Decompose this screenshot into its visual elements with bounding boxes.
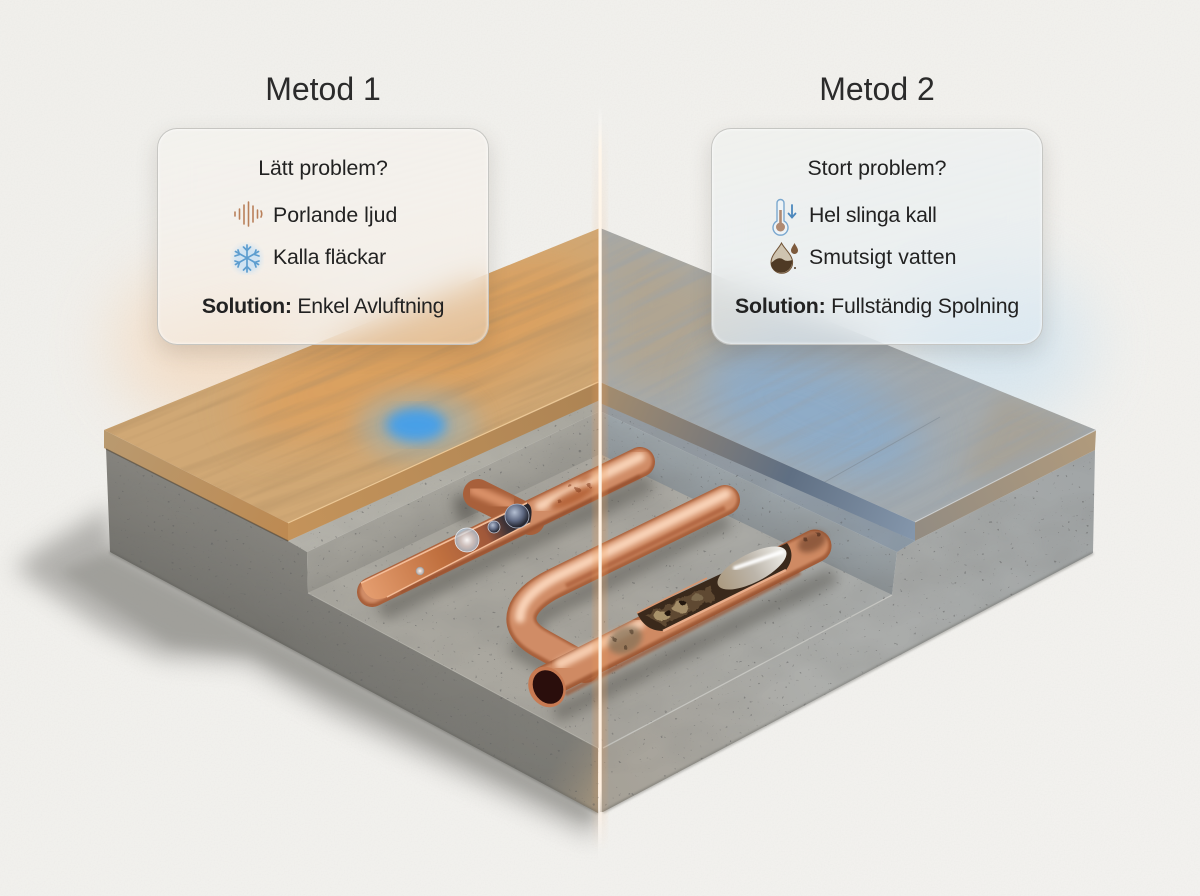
- solution text: Solution: Fullständig Spolning: [735, 294, 1019, 318]
- glow: blue behind right panel: [890, 265, 1090, 425]
- central divider line with glow: [593, 105, 607, 850]
- pipe open end: [521, 660, 573, 714]
- pipe stub behind: [474, 490, 530, 520]
- copper pipe: right with sludge: [521, 527, 829, 714]
- cold spot on wood: [358, 391, 478, 459]
- left wood floor panel: [104, 228, 598, 542]
- corrosion patch: [548, 472, 596, 513]
- corrosion: [603, 527, 829, 660]
- soft pipe shadows: [380, 482, 835, 715]
- copper pipe: middle U-bend: [520, 494, 726, 668]
- pit wall left: [307, 412, 598, 593]
- air bubble small: [488, 521, 500, 533]
- contact shadow under wood on pit wall: [602, 400, 915, 552]
- cutaway window with sludge and trapped air: [637, 538, 792, 631]
- sludge debris: [645, 585, 715, 626]
- solution text: Solution: Enkel Avluftning: [202, 294, 444, 318]
- pit wall right: [602, 412, 897, 595]
- icon: dirty water drops: [770, 242, 798, 274]
- icon: sound wave: [234, 201, 262, 227]
- floor edge highlight: [603, 595, 892, 748]
- symptom text: Kalla fläckar: [273, 245, 386, 269]
- rim top right: [602, 400, 915, 552]
- air bubble tiny: [416, 567, 424, 575]
- air bubble dark: [505, 504, 529, 528]
- symptom text: Porlande ljud: [273, 203, 397, 227]
- cutaway window with air bubbles: [361, 503, 532, 599]
- pit floor: [308, 450, 892, 748]
- cast shadow on the ground: [14, 505, 600, 838]
- heading: Metod 1: Metod 1: [265, 71, 381, 107]
- right outer face: [600, 450, 1095, 812]
- panel heading: Lätt problem?: [258, 156, 388, 180]
- concrete block: [100, 395, 1100, 820]
- panel heading: Stort problem?: [808, 156, 946, 180]
- left outer face: [106, 448, 598, 813]
- panel: light problem: [157, 128, 489, 345]
- right wood floor panel: [602, 228, 1096, 541]
- copper pipe: left, upper with air bubbles: [361, 457, 640, 599]
- lower face edge shade: [110, 552, 1093, 813]
- icon: thermometer falling: [772, 198, 796, 236]
- icon: snowflake: [231, 244, 263, 275]
- illustration: cross-section of floor with pipes: [4, 132, 1108, 848]
- symptom text: Smutsigt vatten: [809, 245, 957, 269]
- symptom text: Hel slinga kall: [809, 203, 937, 227]
- glow: orange behind left panel: [115, 265, 315, 425]
- heading: Metod 2: Metod 2: [819, 71, 935, 107]
- panel: big problem: [711, 128, 1043, 345]
- rim top left: [288, 400, 598, 552]
- air bubble large: [455, 528, 479, 552]
- trapped air blob: [712, 538, 792, 598]
- concrete mottling and specks: [100, 395, 1100, 820]
